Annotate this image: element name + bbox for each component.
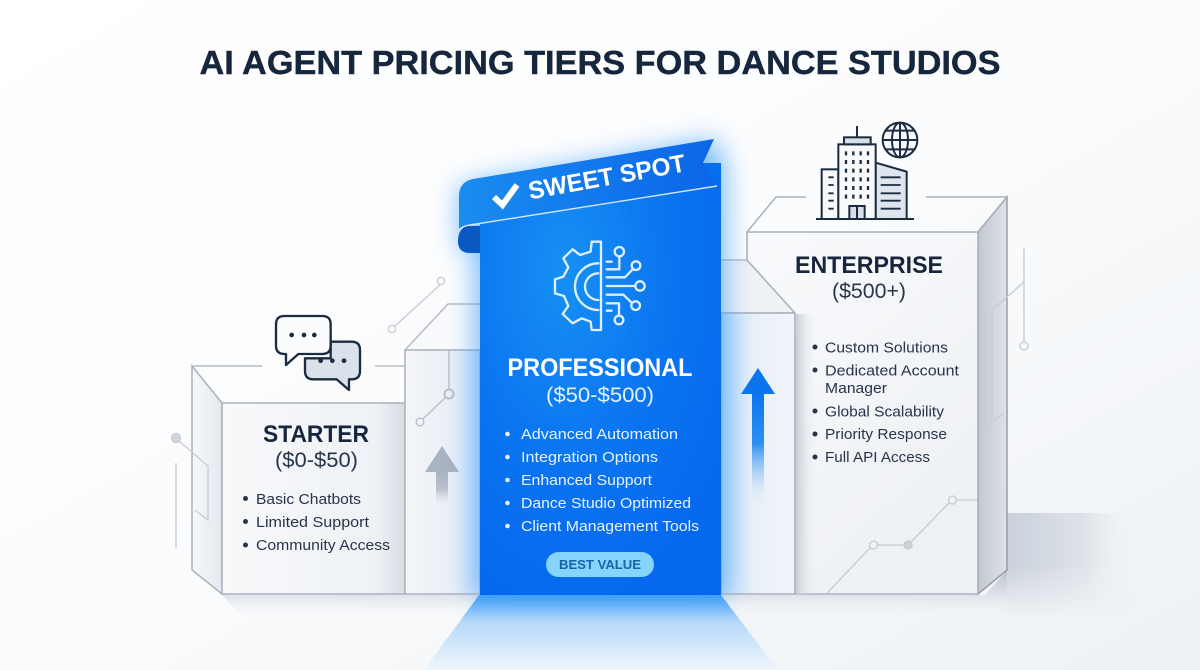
panel glow — [459, 139, 726, 595]
panel: right connector block — [721, 260, 795, 594]
enterprise right side — [978, 197, 1007, 594]
banner text: SWEET SPOT — [526, 149, 688, 205]
starter front face — [222, 403, 405, 594]
icon: office buildings and globe — [816, 123, 917, 219]
panel: starter — [192, 316, 405, 594]
enterprise top edges — [747, 197, 1007, 232]
best value pill: BEST VALUE — [559, 557, 641, 572]
starter price: ($0-$50) — [275, 449, 358, 472]
enterprise price: ($500+) — [832, 280, 906, 303]
enterprise features: Dedicated Account — [825, 362, 960, 380]
best value pill — [546, 552, 654, 577]
arrow: gray up — [425, 446, 459, 507]
light beam under professional — [424, 595, 778, 670]
circuit on connector block — [416, 350, 454, 426]
enterprise features: Global Scalability — [825, 404, 945, 420]
starter heading: STARTER — [263, 421, 369, 448]
panel: left connector block — [405, 304, 480, 594]
professional features — [505, 426, 699, 535]
enterprise front shading — [796, 314, 816, 594]
professional price: ($50-$500) — [546, 384, 654, 407]
enterprise features — [812, 340, 960, 466]
title: AI AGENT PRICING TIERS FOR DANCE STUDIOS — [200, 44, 1000, 81]
sweet spot banner — [458, 139, 717, 253]
starter side face — [192, 366, 222, 594]
floor shadows — [222, 513, 1137, 620]
enterprise features: Custom Solutions — [825, 340, 948, 356]
professional features: Enhanced Support — [521, 472, 653, 489]
icon: chat bubbles — [276, 316, 360, 390]
starter features: Community Access — [256, 537, 390, 554]
enterprise features: Priority Response — [825, 426, 947, 443]
enterprise features: Manager — [825, 380, 887, 397]
panel: enterprise — [747, 123, 1007, 594]
icon: gear and circuit brain — [555, 242, 645, 330]
starter top edges — [192, 365, 405, 367]
banner curl — [458, 226, 480, 253]
enterprise features: Full API Access — [825, 449, 930, 466]
circuit lines over side faces — [172, 248, 1028, 548]
enterprise heading: ENTERPRISE — [795, 252, 943, 279]
professional features: Client Management Tools — [521, 518, 699, 535]
starter features: Limited Support — [256, 514, 370, 531]
starter features — [243, 491, 390, 554]
professional heading: PROFESSIONAL — [508, 354, 692, 382]
panel: professional — [480, 163, 721, 595]
banner ribbon — [459, 139, 717, 230]
professional panel body — [480, 163, 721, 595]
professional features: Integration Options — [521, 449, 658, 466]
arrow: blue up — [741, 368, 775, 504]
enterprise front face — [747, 232, 978, 594]
circuit on enterprise — [827, 496, 977, 593]
starter features: Basic Chatbots — [256, 491, 361, 508]
professional features: Advanced Automation — [521, 426, 678, 443]
professional features: Dance Studio Optimized — [521, 495, 691, 512]
icon: check mark — [494, 185, 517, 205]
